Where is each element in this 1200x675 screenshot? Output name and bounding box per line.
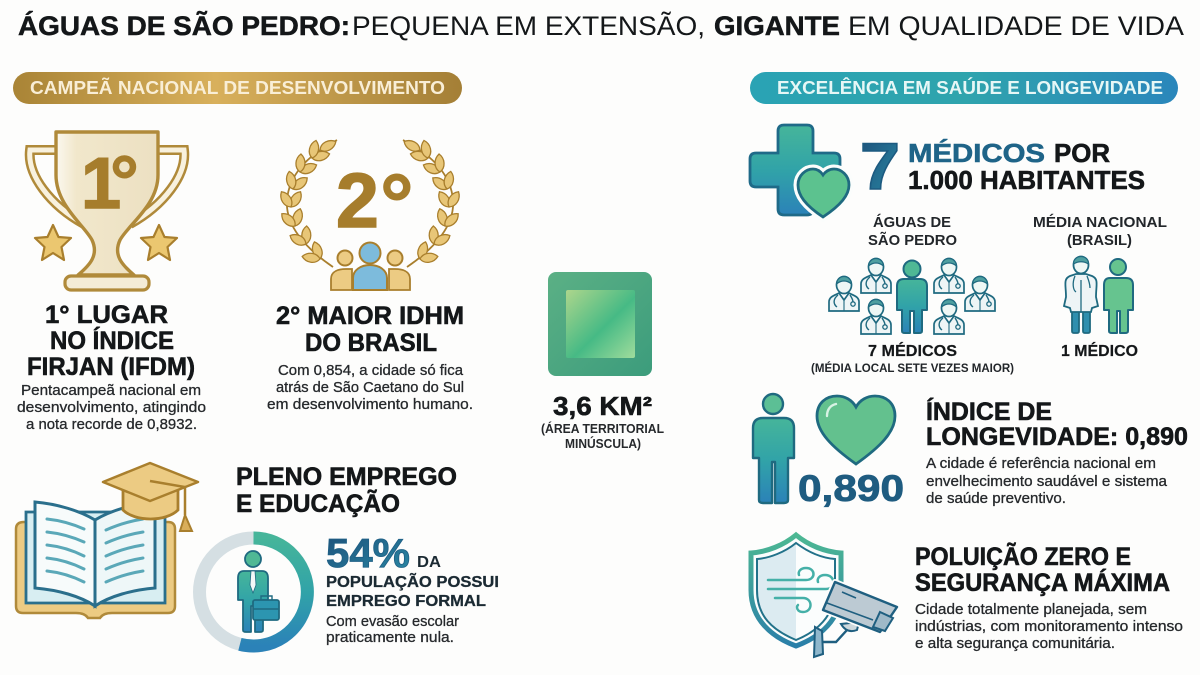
text block: 2º maior IDHM: 2° MAIOR IDHM bbox=[276, 302, 464, 330]
panel heading: campeã nacional bbox=[13, 72, 462, 104]
heading: 7 médicos por 1.000 habitantes: MÉDICOS bbox=[908, 138, 1045, 168]
icon: green territory square bbox=[548, 272, 652, 376]
heading: pleno emprego: E EDUCAÇÃO bbox=[236, 488, 400, 518]
text block: 2º maior IDHM: DO BRASIL bbox=[305, 329, 437, 357]
text block: área territorial: MINÚSCULA) bbox=[565, 436, 641, 451]
text block: 2º maior IDHM bbox=[267, 302, 473, 413]
pictogram: one doctor and one person bbox=[1064, 256, 1133, 333]
icon: trophy: 1 bbox=[81, 144, 121, 224]
title: ÁGUAS DE SÃO PEDRO: bbox=[18, 11, 350, 41]
column label: média nacional bbox=[1033, 214, 1167, 249]
text block: área territorial: (ÁREA TERRITORIAL bbox=[541, 421, 664, 436]
text block: 1º lugar IFDM: 1° LUGAR bbox=[45, 301, 168, 329]
heading: 7 médicos por 1.000 habitantes: 1.000 HABITANTES bbox=[908, 165, 1145, 195]
column label: média nacional: MÉDIA NACIONAL bbox=[1033, 214, 1167, 231]
text block: 1º lugar IFDM: NO ÍNDICE bbox=[50, 326, 174, 355]
icon: medical cross with heart bbox=[750, 125, 849, 217]
text block: poluição zero: POLUIÇÃO ZERO E bbox=[915, 541, 1131, 571]
column label: média nacional: (BRASIL) bbox=[1067, 232, 1132, 249]
column label: Águas de São Pedro: ÁGUAS DE bbox=[873, 214, 951, 231]
text block: índice de longevidade: de saúde preventivo. bbox=[926, 491, 1066, 507]
heading: pleno emprego: PLENO EMPREGO bbox=[236, 463, 457, 491]
icon: person and heart: 0,890 bbox=[798, 468, 904, 509]
text block: índice de longevidade bbox=[926, 397, 1188, 507]
text block: índice de longevidade: LONGEVIDADE: 0,890 bbox=[926, 423, 1188, 451]
label: 7 médicos: (MÉDIA LOCAL SETE VEZES MAIOR) bbox=[811, 362, 1014, 375]
text block: 1º lugar IFDM: FIRJAN (IFDM) bbox=[27, 353, 195, 381]
label: 7 médicos bbox=[811, 343, 1014, 375]
text block: poluição zero: SEGURANÇA MÁXIMA bbox=[915, 568, 1170, 597]
title: GIGANTE bbox=[714, 11, 840, 41]
text block: índice de longevidade: envelhecimento saudável e sistema bbox=[926, 474, 1168, 490]
column label: Águas de São Pedro: SÃO PEDRO bbox=[868, 231, 957, 249]
text block: 1º lugar IFDM: Pentacampeã nacional em bbox=[21, 383, 201, 399]
title: PEQUENA EM EXTENSÃO, bbox=[352, 11, 705, 41]
text block: poluição zero: e alta segurança comunitária. bbox=[915, 636, 1115, 652]
text block: área territorial bbox=[541, 391, 664, 451]
text block: 54% emprego formal: Com evasão escolar bbox=[326, 614, 459, 630]
text block: 1º lugar IFDM: desenvolvimento, atingindo bbox=[17, 400, 206, 416]
text block: índice de longevidade: ÍNDICE DE bbox=[926, 397, 1052, 426]
heading: 7 médicos por 1.000 habitantes: POR bbox=[1054, 138, 1110, 168]
label: 7 médicos: 7 MÉDICOS bbox=[868, 343, 957, 360]
panel heading: excelência em saúde: EXCELÊNCIA EM SAÚDE E LONGEVIDADE bbox=[777, 77, 1163, 98]
text block: poluição zero bbox=[915, 541, 1183, 652]
heading: 7 médicos por 1.000 habitantes bbox=[860, 129, 1145, 203]
icon: person and heart bbox=[753, 394, 904, 509]
text block: 1º lugar IFDM bbox=[17, 301, 206, 433]
icon: shield with wind and security camera bbox=[751, 535, 897, 657]
text block: 54% emprego formal: POPULAÇÃO POSSUI bbox=[326, 571, 499, 591]
pictogram: seven doctors and one person bbox=[829, 258, 995, 334]
text block: poluição zero: Cidade totalmente planejada, sem bbox=[915, 602, 1147, 618]
text block: 54% emprego formal: 54% bbox=[326, 530, 410, 576]
text block: índice de longevidade: A cidade é referência nacional em bbox=[926, 456, 1156, 472]
icon: laurel wreath with people bbox=[278, 138, 462, 290]
text block: 54% emprego formal: EMPREGO FORMAL bbox=[326, 593, 486, 610]
text block: 2º maior IDHM: em desenvolvimento humano. bbox=[267, 397, 473, 413]
panel heading: campeã nacional: CAMPEÃ NACIONAL DE DESENVOLVIMENTO bbox=[30, 77, 445, 98]
icon: trophy bbox=[30, 132, 184, 290]
title bbox=[18, 11, 1184, 41]
icon: open book with graduation cap bbox=[16, 463, 198, 618]
text block: área territorial: 3,6 KM² bbox=[553, 391, 652, 421]
label: 1 médico: 1 MÉDICO bbox=[1061, 343, 1138, 360]
text block: 1º lugar IFDM: a nota recorde de 0,8932. bbox=[26, 417, 197, 433]
heading: pleno emprego bbox=[236, 463, 457, 518]
column label: Águas de São Pedro bbox=[868, 214, 957, 249]
text block: 2º maior IDHM: atrás de São Caetano do Sul bbox=[276, 380, 464, 396]
text block: 54% emprego formal bbox=[326, 530, 499, 646]
icon: trophy: ° bbox=[110, 142, 139, 222]
panel heading: excelência em saúde bbox=[750, 72, 1178, 104]
text block: 54% emprego formal: DA bbox=[417, 554, 441, 571]
title: EM QUALIDADE DE VIDA bbox=[848, 11, 1184, 41]
text block: 2º maior IDHM: Com 0,854, a cidade só fica bbox=[278, 363, 464, 379]
icon: laurel wreath with people: ° bbox=[380, 157, 414, 251]
text block: 54% emprego formal: praticamente nula. bbox=[326, 630, 454, 646]
text block: poluição zero: indústrias, com monitoramento intenso bbox=[915, 619, 1183, 635]
chart: 54% ring with employee bbox=[200, 538, 308, 646]
heading: 7 médicos por 1.000 habitantes: 7 bbox=[860, 129, 900, 203]
icon: laurel wreath with people: 2 bbox=[336, 158, 379, 244]
